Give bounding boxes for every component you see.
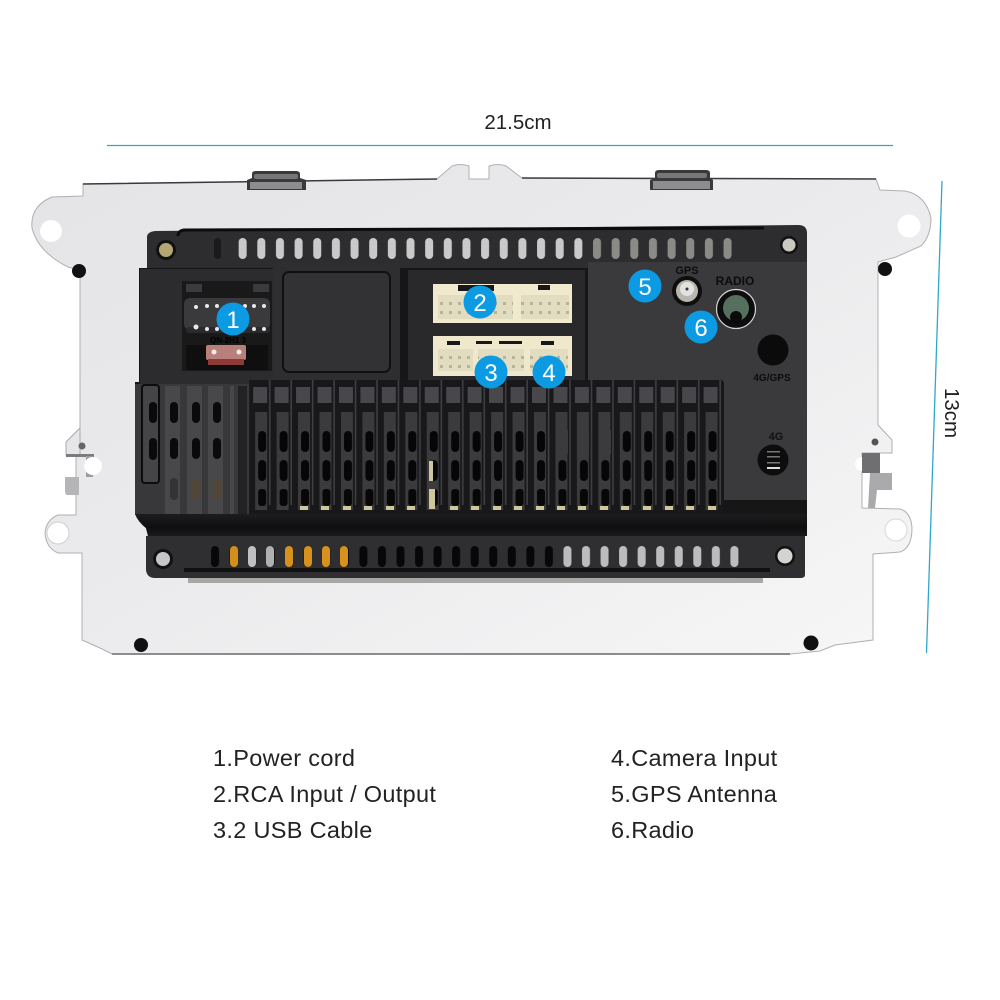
bottom edge shadow [188, 578, 763, 583]
right antenna panel [588, 262, 807, 500]
bottom left screw [153, 549, 173, 569]
lower body shadow band [135, 514, 807, 536]
marker 2 [464, 286, 496, 318]
marker 2: 2 [473, 290, 487, 317]
cooling fins [135, 380, 723, 515]
GPS antenna port [672, 265, 702, 306]
legend right column: 5.GPS Antenna [611, 781, 778, 807]
lower left ear hole [47, 522, 69, 544]
left ear hole [40, 220, 62, 242]
fin hole covers [557, 430, 611, 454]
left wide fins [135, 384, 249, 515]
dimension label: height: 13cm [940, 388, 963, 438]
main body [135, 268, 807, 536]
4G port [758, 431, 788, 476]
marker 6 [684, 310, 718, 344]
power connector [182, 281, 272, 371]
radio port: RADIO [716, 274, 754, 288]
legend left column: 3.2 USB Cable [213, 817, 373, 843]
marker 1 [216, 302, 250, 336]
square cover panel [273, 263, 400, 385]
marker 5: 5 [638, 274, 652, 301]
radio port [716, 274, 756, 328]
marker 4: 4 [542, 360, 556, 387]
legend left column [213, 745, 436, 843]
left side bracket [65, 428, 102, 495]
dimension line: width [107, 144, 893, 146]
top vent band [147, 225, 807, 275]
power connector: QN-2H1 3 [210, 336, 247, 345]
left connector panel [140, 269, 275, 387]
GPS antenna port: GPS [675, 265, 699, 277]
RCA connector [433, 284, 572, 323]
4G port: 4G [769, 431, 783, 443]
marker 1: 1 [226, 307, 240, 334]
connector bay [408, 270, 585, 382]
right ear hole [898, 214, 920, 238]
metal mounting plate [32, 164, 931, 654]
marker 6: 6 [694, 315, 708, 342]
legend left column: 1.Power cord [213, 745, 355, 771]
legend left column: 2.RCA Input / Output [213, 781, 436, 807]
bottom vent slots [184, 546, 770, 570]
legend right column: 6.Radio [611, 817, 694, 843]
legend right column [611, 745, 778, 843]
marker 5 [628, 270, 662, 302]
marker 4 [532, 356, 566, 388]
dimension label: width: 21.5cm [484, 111, 552, 134]
plate outline [32, 164, 931, 654]
USB and camera connector [433, 336, 572, 376]
dimension line: height [926, 181, 942, 653]
plate screws [72, 262, 892, 652]
fuse [186, 345, 268, 370]
lower right ear hole [885, 519, 907, 541]
top right screw [780, 236, 798, 254]
bottom right screw [775, 546, 795, 566]
plate top edge [83, 178, 876, 184]
marker 3 [474, 356, 508, 388]
4G GPS port: 4G/GPS [753, 373, 791, 384]
legend right column: 4.Camera Input [611, 745, 778, 771]
top left screw [156, 240, 176, 260]
cream highlights behind fins [300, 461, 716, 510]
head unit body [135, 225, 807, 583]
right side bracket [855, 438, 892, 508]
top vent slots [178, 228, 764, 260]
mounting tabs [247, 170, 713, 190]
4G GPS port [753, 334, 791, 384]
marker 3: 3 [484, 360, 498, 387]
plate bottom edge [112, 653, 790, 655]
bottom vent band [146, 536, 805, 578]
